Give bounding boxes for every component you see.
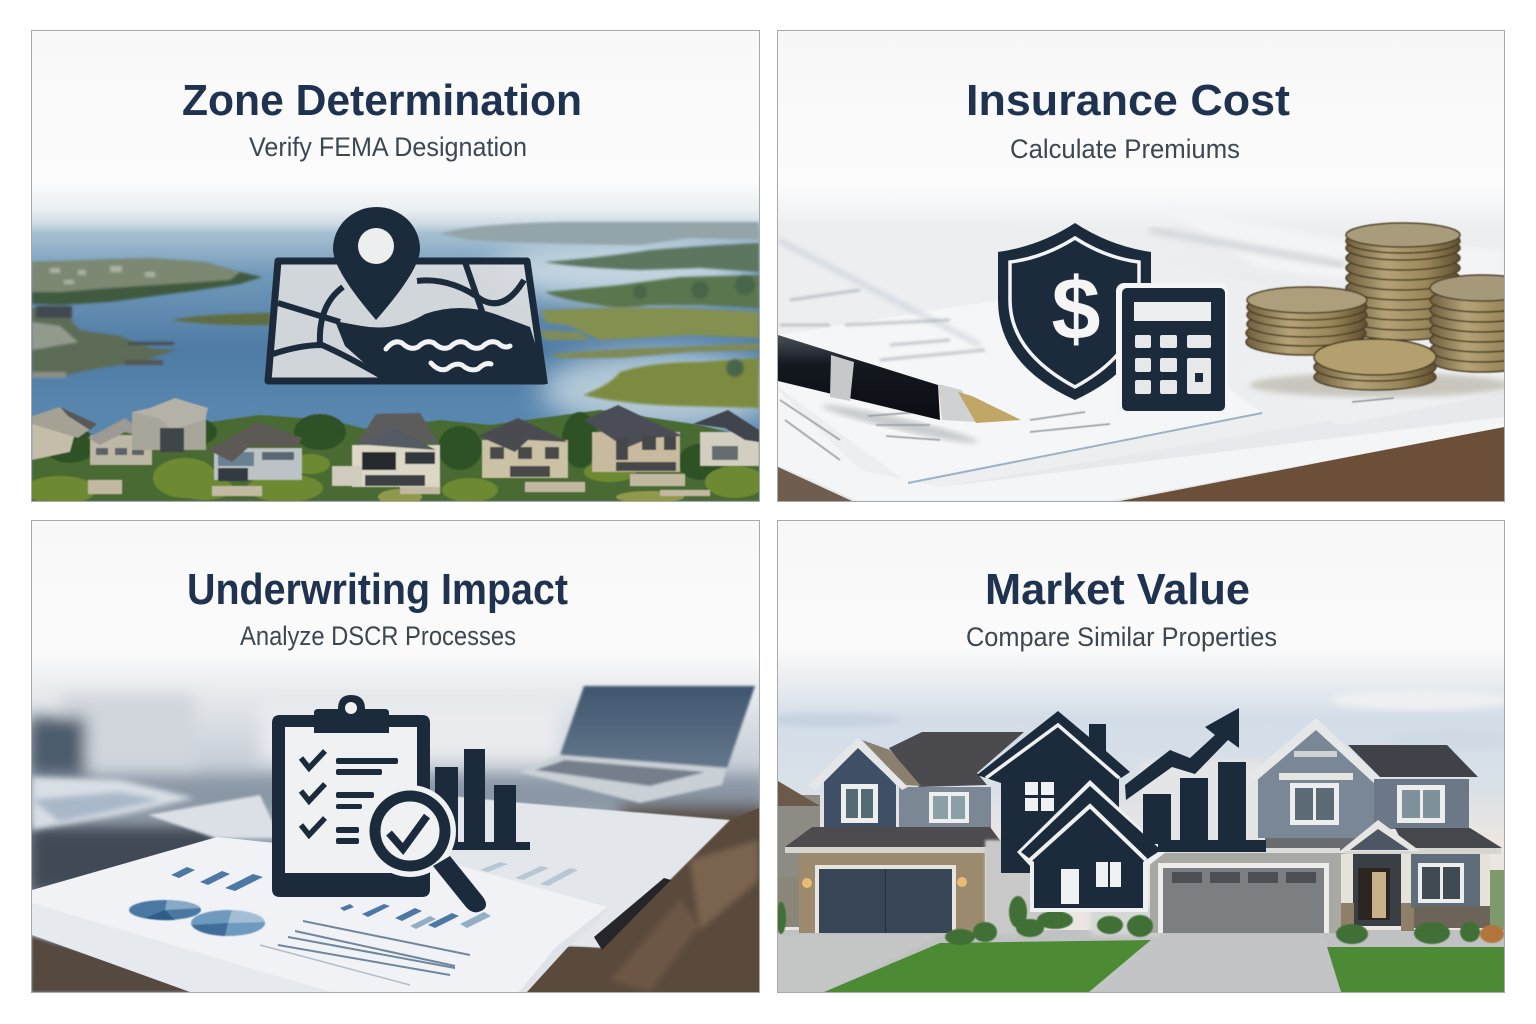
title: Insurance Cost [966, 76, 1290, 125]
shrubs [776, 896, 1504, 945]
panel: zone determination [24, 30, 780, 505]
icon: map with pin and water [268, 207, 548, 384]
house [208, 422, 302, 481]
house [32, 407, 97, 460]
clipboard clip [314, 695, 389, 733]
icon: bar chart [435, 749, 530, 850]
house [584, 405, 683, 472]
house [693, 410, 759, 466]
subtitle: Verify FEMA Designation [249, 132, 527, 162]
faded centre of the street behind icon [985, 760, 1260, 935]
panel: insurance cost [778, 30, 1534, 502]
title: Zone Determination [182, 76, 582, 125]
house [88, 418, 153, 465]
icon: large house [977, 711, 1130, 873]
sky and lawn backdrop [760, 521, 1510, 992]
icon: coin stacks [1246, 223, 1534, 397]
coastal photo backdrop [32, 189, 759, 501]
dollar sign: $ [1052, 259, 1100, 358]
coin stack: right [1428, 273, 1504, 374]
icon: small house [1017, 780, 1166, 912]
subtitle: Calculate Premiums [1010, 134, 1240, 164]
icon: location pin [333, 207, 420, 320]
icon: bars and arrow [1125, 708, 1266, 852]
title: Market Value [985, 565, 1250, 614]
subtitle: Compare Similar Properties [966, 622, 1277, 652]
title: Underwriting Impact [187, 565, 568, 614]
left house [778, 732, 1024, 933]
icon: houses with growth chart [977, 708, 1266, 912]
panel: market value [760, 520, 1510, 992]
house [332, 413, 440, 487]
house [132, 398, 208, 452]
subtitle: Analyze DSCR Processes [240, 621, 516, 651]
panel: underwriting impact [28, 520, 770, 1000]
coin stack: left [1246, 287, 1367, 355]
icon: pen [778, 335, 1021, 448]
right house [1150, 718, 1504, 933]
houses on shore [32, 398, 759, 487]
coin stack: tall [1346, 223, 1460, 340]
laptop [519, 686, 755, 803]
icon: calculator [1116, 283, 1228, 414]
blurred desk backdrop [32, 661, 759, 992]
coin stack: front [1314, 339, 1436, 390]
wood desk, right side [523, 808, 759, 992]
icon: clipboard checklist [272, 695, 430, 897]
icon: shield with dollar [998, 223, 1151, 400]
house [478, 418, 568, 478]
papers with charts [32, 795, 730, 992]
foreground shore trees [24, 410, 765, 505]
icon: magnifier [364, 785, 486, 912]
desk and papers backdrop [778, 199, 1504, 501]
